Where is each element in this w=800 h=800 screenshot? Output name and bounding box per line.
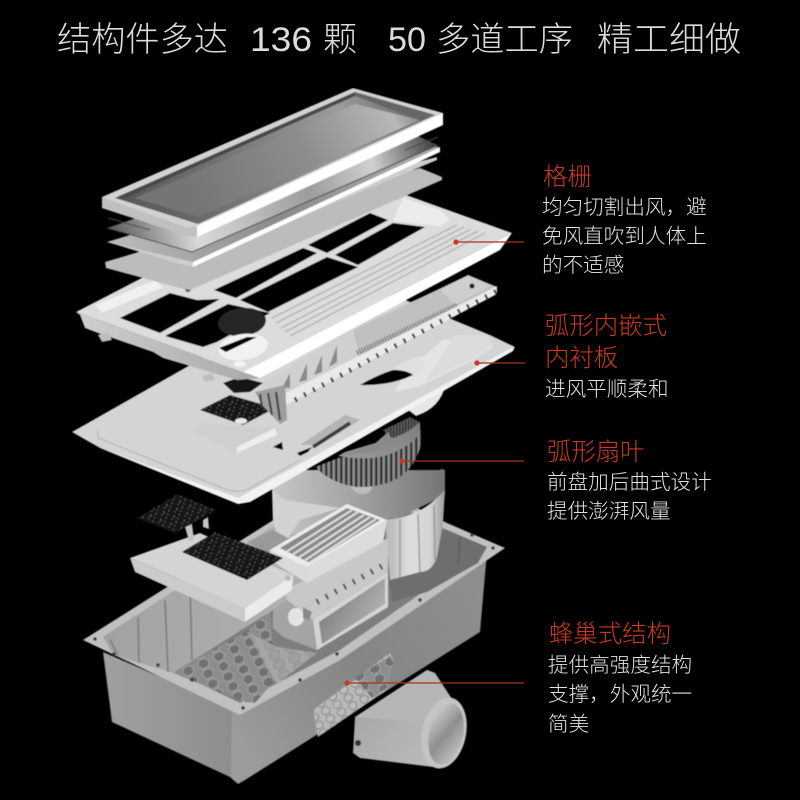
rim screws <box>93 533 495 710</box>
top cover frame <box>102 88 443 237</box>
diffuser layer <box>107 146 440 267</box>
rectangular slot opening <box>283 403 375 455</box>
title: 颗 <box>323 21 357 59</box>
circuit board front <box>182 532 283 580</box>
exhaust duct <box>353 670 473 773</box>
glass sheets <box>107 128 438 252</box>
exploded product illustration <box>72 88 515 784</box>
inner PCB <box>200 395 275 425</box>
tabs <box>98 332 112 342</box>
round vent hole <box>216 331 270 363</box>
side opening with honeycomb <box>313 653 393 737</box>
callout: arc fan blade: 前盘加后曲式设计 <box>547 471 712 494</box>
ventilated lower tray <box>223 275 497 424</box>
callout: arc inner liner <box>474 313 669 401</box>
callout: honeycomb structure: 简美 <box>548 713 589 736</box>
callout: arc inner liner: 进风平顺柔和 <box>545 378 669 401</box>
callout: honeycomb structure: 蜂巢式结构 <box>549 621 671 648</box>
callout: honeycomb structure <box>344 621 692 736</box>
callout: honeycomb structure: 支撑，外观统一 <box>548 683 692 706</box>
callout: honeycomb structure: 提供高强度结构 <box>548 654 692 677</box>
grille plate <box>76 173 512 382</box>
base panel of stack <box>105 168 442 290</box>
heat exchanger <box>270 504 387 583</box>
title: 多道工序 <box>436 21 573 59</box>
title <box>57 21 741 59</box>
heatsink and connectors <box>223 377 263 393</box>
callout: grille: 的不适感 <box>542 254 624 277</box>
bottom box body <box>83 473 505 784</box>
control box tray <box>130 533 293 622</box>
callout: grille: 均匀切割出风，避 <box>542 196 707 219</box>
right interior wall <box>385 529 487 602</box>
callout: grille: 免风直吹到人体上 <box>542 225 707 248</box>
heater duct unit <box>273 538 388 650</box>
air guide ribs <box>272 225 485 336</box>
comb teeth <box>357 305 457 353</box>
callout: grille <box>453 164 707 277</box>
far interior wall <box>103 480 345 673</box>
black disc <box>217 306 267 338</box>
inner mount plate <box>195 423 277 453</box>
grille windows <box>120 213 425 347</box>
air inlet opening <box>392 356 424 378</box>
circuit board rear <box>137 494 217 541</box>
fins <box>282 345 337 388</box>
title: 50 <box>388 21 426 59</box>
callout: arc fan blade <box>399 439 712 523</box>
callout: arc inner liner: 弧形内嵌式 <box>545 313 667 340</box>
plate: arc inner liner <box>72 276 515 504</box>
icon: curved fan wheel <box>315 417 421 494</box>
air inlet bowl below liner <box>395 383 446 416</box>
fan housing <box>247 469 445 580</box>
callout: arc fan blade: 弧形扇叶 <box>547 439 645 466</box>
callout: arc inner liner: 内衬板 <box>545 345 618 372</box>
honeycomb floor <box>173 612 317 703</box>
lower rail <box>280 286 497 405</box>
title: 精工细做 <box>597 21 741 59</box>
callout: arc fan blade: 提供澎湃风量 <box>547 500 671 523</box>
callout: grille: 格栅 <box>543 164 592 191</box>
title: 136 <box>250 21 312 59</box>
title: 结构件多达 <box>57 21 228 59</box>
